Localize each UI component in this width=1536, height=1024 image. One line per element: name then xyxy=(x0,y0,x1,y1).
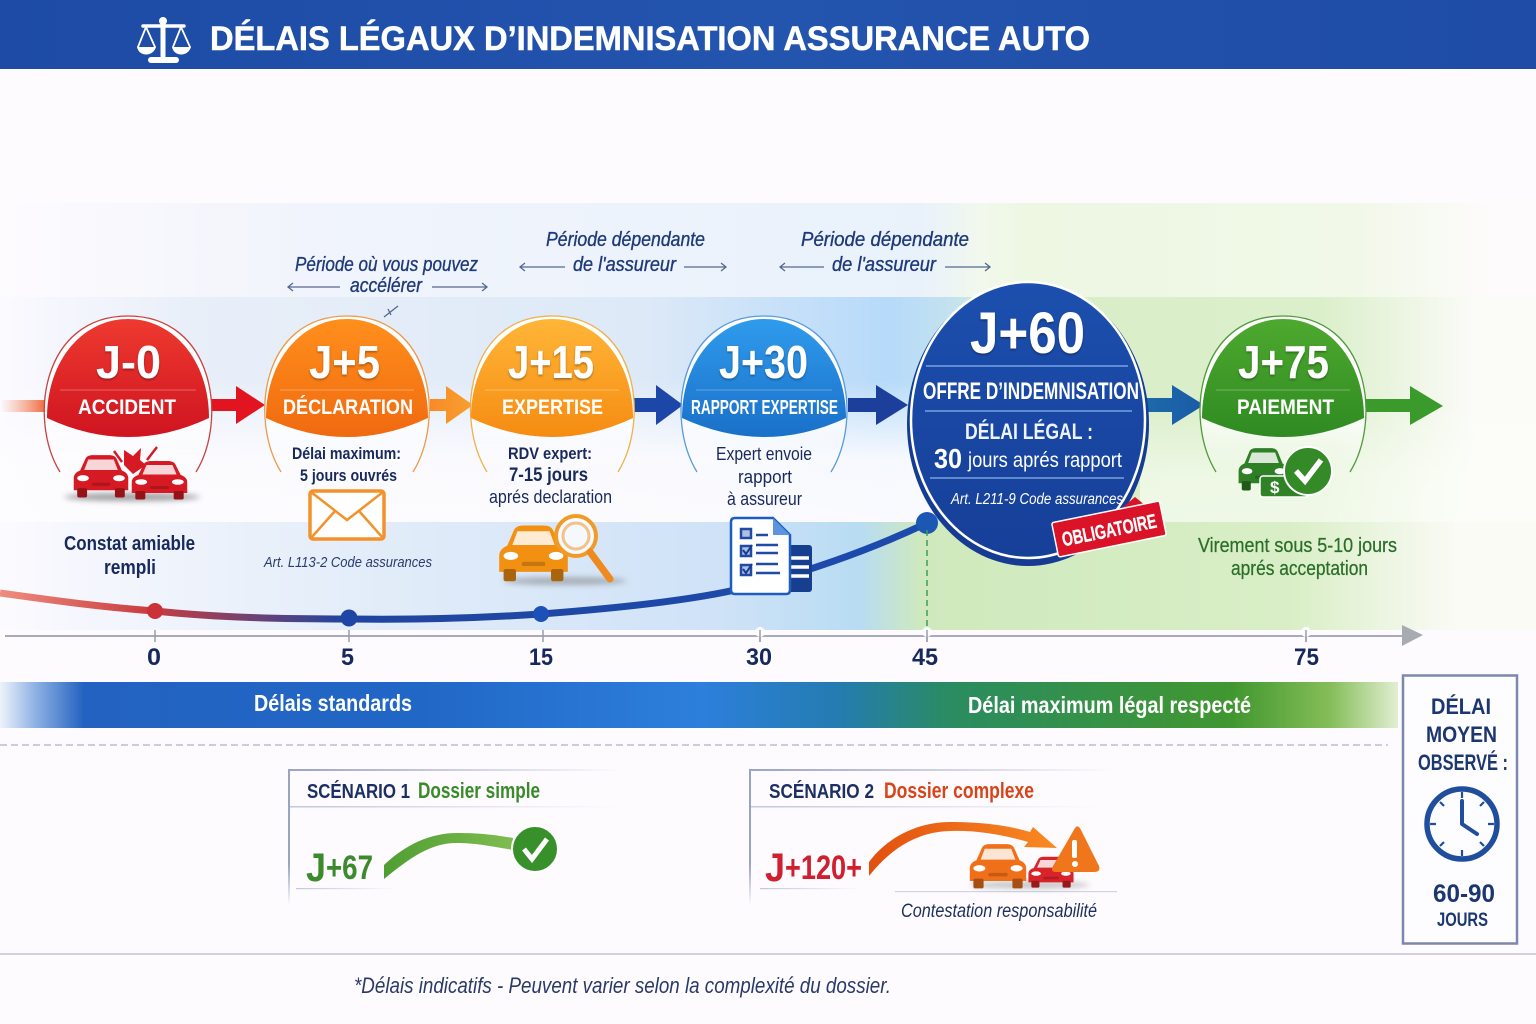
panel: délai moyen observé: DÉLAI xyxy=(1431,694,1491,719)
text: expert envoie rapport: à assureur xyxy=(727,489,802,509)
guide line at day 45 xyxy=(926,530,928,632)
stage: J+30 rapport expertise xyxy=(681,316,847,594)
stage: J+5 déclaration xyxy=(263,316,432,571)
text: RDV expert: RDV expert: xyxy=(508,444,592,463)
panel: scénario 1 xyxy=(288,769,623,905)
panel: délai moyen observé xyxy=(1403,676,1517,944)
panel: délai moyen observé: OBSERVÉ : xyxy=(1418,750,1508,775)
time axis: 45 xyxy=(912,644,938,671)
text: délai maximum xyxy=(292,444,401,485)
lead-in line xyxy=(0,400,48,412)
text: RDV expert xyxy=(489,444,612,507)
time axis: 30 xyxy=(746,644,772,671)
panel: scénario 1: +67 xyxy=(326,849,373,887)
panel: scénario 2: +120+ xyxy=(785,849,862,887)
panel: scénario 1: J xyxy=(306,846,326,890)
annotation: période dépendante de l'assureur 1 xyxy=(520,229,726,276)
status bar xyxy=(0,682,1398,728)
time axis: 15 xyxy=(529,644,553,671)
header banner xyxy=(0,0,1536,69)
background fade over the green zone xyxy=(1140,400,1536,522)
text: expert envoie rapport xyxy=(716,444,812,509)
stage: J+15 expertise xyxy=(471,316,634,585)
icon: car, cash and check xyxy=(1239,447,1332,497)
stage: J+30 rapport expertise: RAPPORT EXPERTISE xyxy=(691,397,838,419)
status bar: Délai maximum légal respecté xyxy=(968,692,1251,718)
stage: J+75 paiement: J+75 xyxy=(1238,336,1329,388)
stage: J+30 rapport expertise: J+30 xyxy=(719,336,808,388)
badge: obligatoire xyxy=(1052,497,1166,557)
stage: J+5 déclaration: DÉCLARATION xyxy=(283,396,413,419)
arrow: orange curve xyxy=(869,822,1057,876)
icon: car crash xyxy=(64,447,200,501)
background band: main timeline zone xyxy=(0,297,1536,522)
arrow: J+30 to J+60 xyxy=(848,385,908,425)
text: délai maximum: 5 jours ouvrés xyxy=(300,466,397,485)
time axis: 5 xyxy=(341,644,354,671)
icon: envelope xyxy=(310,491,384,539)
panel: délai moyen observé: 60-90 xyxy=(1433,880,1495,908)
text: expert envoie rapport: rapport xyxy=(738,467,792,487)
text: RDV expert: aprés declaration xyxy=(489,487,612,507)
text: virement xyxy=(1198,535,1397,580)
stage: J+60 offre d'indemnisation: J+60 xyxy=(970,301,1085,366)
background fade over the main timeline zone xyxy=(0,380,935,522)
text: délai maximum: Délai maximum: xyxy=(292,444,401,463)
panel: délai moyen observé: MOYEN xyxy=(1426,722,1497,747)
panel: délai moyen observé: JOURS xyxy=(1437,910,1488,931)
arrow: J+15 to J+30 xyxy=(634,385,683,425)
text: expert envoie rapport: Expert envoie xyxy=(716,444,812,464)
annotation: période dépendante de l'assureur 2 xyxy=(780,229,990,276)
stage: J+60 offre d'indemnisation: 30 xyxy=(934,443,962,474)
icon: warning triangle xyxy=(1052,826,1099,872)
badge: obligatoire: OBLIGATOIRE xyxy=(1060,511,1159,551)
text: virement: Virement sous 5-10 jours xyxy=(1198,535,1397,557)
annotation: période dépendante de l'assureur 2: de l'assureur xyxy=(832,254,937,276)
stage: J+15 expertise: J+15 xyxy=(508,336,594,388)
arrow: J+60 to J+75 xyxy=(1146,385,1204,425)
stage: J-0 accident: ACCIDENT xyxy=(78,396,176,419)
icon: report document xyxy=(731,518,812,594)
panel: scénario 2: SCÉNARIO 2 xyxy=(769,780,874,803)
time axis xyxy=(5,625,1423,671)
text: virement: aprés acceptation xyxy=(1231,558,1368,580)
stage: J+60 offre d'indemnisation: jours aprés rapport xyxy=(967,449,1122,472)
annotation: période où vous pouvez accélérer: accélérer xyxy=(350,275,423,297)
panel: scénario 2: J xyxy=(765,846,785,890)
background band: lower timeline zone xyxy=(0,522,1536,630)
arrow: J+5 to J+15 xyxy=(430,386,473,424)
annotation: période où vous pouvez accélérer xyxy=(288,254,487,317)
panel: scénario 2 xyxy=(749,769,1117,922)
stage: J+75 paiement xyxy=(1198,316,1397,580)
footnote: *Délais indicatifs - Peuvent varier selon la complexité du dossier. xyxy=(354,973,891,998)
text: contestation responsabilité: Contestation responsabilité xyxy=(901,901,1097,922)
annotation: période où vous pouvez accélérer: Période où vous pouvez xyxy=(295,254,478,276)
panel: scénario 2: Dossier complexe xyxy=(884,778,1034,803)
arrow: after J+75 xyxy=(1364,386,1443,425)
stage: J-0 accident: J-0 xyxy=(96,336,161,388)
stage: J+60 offre d'indemnisation: OFFRE D’INDEMNISATION xyxy=(923,378,1139,405)
arrow: green curve xyxy=(384,833,513,879)
text: article L113-2: Art. L113-2 Code assurances xyxy=(263,555,432,571)
time axis: 0 xyxy=(147,644,161,671)
background band: upper timeline zone xyxy=(0,203,1536,297)
stage: J+60 offre d'indemnisation: Art. L211-9 Code assurances xyxy=(950,491,1123,508)
time axis: 75 xyxy=(1294,644,1319,671)
stage: J+15 expertise: EXPERTISE xyxy=(502,396,603,419)
stage: J+60 offre d'indemnisation: DÉLAI LÉGAL : xyxy=(965,419,1093,444)
text: constat amiable xyxy=(64,533,195,579)
timeline curve xyxy=(0,512,938,626)
icon: car with magnifier xyxy=(499,516,627,585)
stage: J+75 paiement: PAIEMENT xyxy=(1237,396,1334,419)
stage: J+5 déclaration: J+5 xyxy=(309,336,380,388)
panel: scénario 1: Dossier simple xyxy=(418,778,540,803)
icon: green check xyxy=(512,826,558,872)
stage: J-0 accident xyxy=(44,316,212,579)
stage: J+60 offre d'indemnisation xyxy=(907,282,1166,566)
text: constat amiable: rempli xyxy=(104,557,156,579)
arrow: J-0 to J+5 xyxy=(210,386,265,424)
icon: scales of justice xyxy=(137,17,191,60)
panel: scénario 1: SCÉNARIO 1 xyxy=(307,780,410,803)
text: RDV expert: 7-15 jours xyxy=(509,465,588,486)
icon: car, cash and check: $ xyxy=(1270,478,1280,497)
icon: two cars xyxy=(970,844,1090,888)
text: constat amiable: Constat amiable xyxy=(64,533,195,555)
icon: clock xyxy=(1427,789,1497,859)
annotation: période dépendante de l'assureur 1: de l'assureur xyxy=(573,254,677,276)
annotation: période dépendante de l'assureur 1: Période dépendante xyxy=(546,229,705,251)
title: DÉLAIS LÉGAUX D’INDEMNISATION ASSURANCE AUTO xyxy=(210,20,1090,58)
annotation: période dépendante de l'assureur 2: Période dépendante xyxy=(801,229,969,251)
status bar: Délais standards xyxy=(254,690,412,716)
